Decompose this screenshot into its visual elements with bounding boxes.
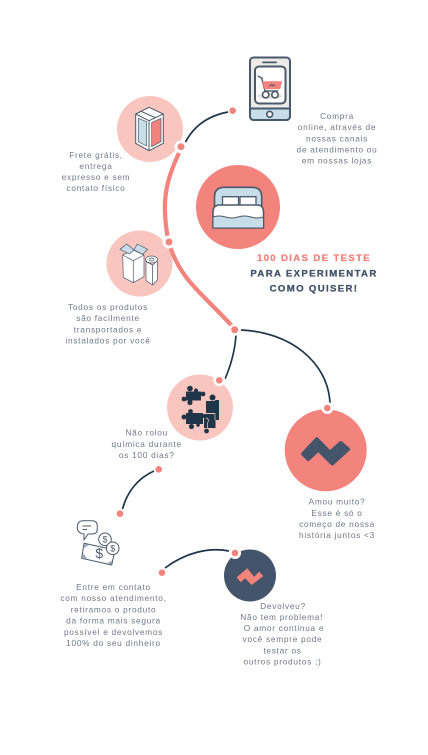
text: free shipping: Frete grátis, — [69, 150, 123, 160]
circle: love background — [285, 409, 367, 491]
text: contact: Entre em contato — [76, 582, 151, 592]
text: products — [65, 302, 151, 346]
text: no chemistry: Não rolou — [125, 428, 168, 438]
icon: zigzag logo dark — [301, 437, 350, 466]
text: free shipping: expresso e sem — [62, 172, 130, 182]
circle: puzzle background — [167, 374, 233, 440]
puzzle seams — [205, 414, 215, 428]
text: loved it: Amou muito? — [309, 496, 365, 506]
text: products: transportados e — [74, 324, 142, 334]
dollar signs: $ — [102, 534, 108, 544]
text: free shipping: contato físico — [67, 183, 125, 193]
icon: smartphone with cart — [250, 58, 290, 120]
dollar signs: $ — [110, 544, 115, 554]
text: purchase: de atendimento ou — [297, 144, 377, 154]
icon: puzzle pieces — [182, 386, 219, 433]
text: returned: Devolveu? — [260, 601, 306, 611]
icon: bed — [213, 187, 264, 228]
text: contact: retiramos o produto — [71, 604, 156, 614]
text: purchase: nossas canais — [306, 134, 368, 144]
text: purchase: Compra — [320, 111, 354, 121]
bill corners — [82, 544, 112, 564]
text: products: são facilmente — [76, 313, 140, 323]
icon: zigzag logo coral — [237, 568, 263, 585]
heading: 100 days trial: PARA EXPERIMENTAR — [250, 268, 378, 280]
icon: packaged box — [136, 107, 163, 151]
curve: to love — [241, 330, 330, 403]
icon: open boxes — [120, 244, 158, 285]
text: no chemistry: os 100 dias? — [119, 450, 175, 460]
text: returned: O amor continua e — [244, 623, 324, 633]
circle: bed background — [196, 165, 280, 249]
text: loved it — [299, 496, 375, 540]
text: returned — [240, 601, 324, 666]
text: contact: 100% do seu dinheiro — [66, 638, 161, 648]
text: free shipping: entrega — [79, 161, 113, 171]
circle: box icon background — [117, 96, 183, 162]
heading: 100 days trial: COMO QUISER! — [270, 284, 358, 294]
curve: puzzle to money — [122, 471, 154, 509]
text: products: Todos os produtos — [68, 302, 148, 312]
heading: 100 days trial: 100 DIAS DE TESTE — [257, 253, 371, 264]
text: contact — [60, 582, 167, 648]
text: returned: você sempre pode — [243, 634, 322, 644]
text: no chemistry — [112, 428, 182, 460]
text: returned: Não tem problema! — [240, 612, 323, 622]
text: no chemistry: química durante — [112, 439, 182, 449]
text: purchase: em nossas lojas — [302, 156, 372, 166]
thick journey curve — [165, 153, 232, 326]
text: loved it: história juntos <3 — [299, 530, 375, 540]
text: returned: outros produtos ;) — [244, 656, 322, 666]
text: returned: testar os — [263, 646, 302, 656]
text: free shipping — [62, 150, 130, 193]
circle: boxes icon background — [106, 230, 172, 296]
text: loved it: começo de nossa — [299, 519, 375, 529]
dollar signs: $ — [95, 545, 103, 561]
heading: 100 days trial — [250, 253, 378, 294]
curve: phone to main line — [185, 112, 228, 143]
text: products: instalados por você — [65, 336, 151, 346]
text: loved it: Esse é só o — [311, 508, 363, 518]
dots — [117, 107, 333, 576]
text: purchase — [297, 111, 377, 166]
text: purchase: online, através de — [298, 122, 376, 132]
icon: money and chat — [77, 521, 119, 565]
text: contact: com nosso atendimento, — [60, 593, 167, 603]
text: contact: da forma mais segura — [66, 616, 161, 626]
text: contact: possível e devolvemos — [64, 627, 163, 637]
dollar signs — [95, 534, 115, 561]
curve: to puzzle — [225, 335, 236, 379]
circle: return background — [224, 550, 276, 602]
curve: money to return — [165, 550, 229, 568]
